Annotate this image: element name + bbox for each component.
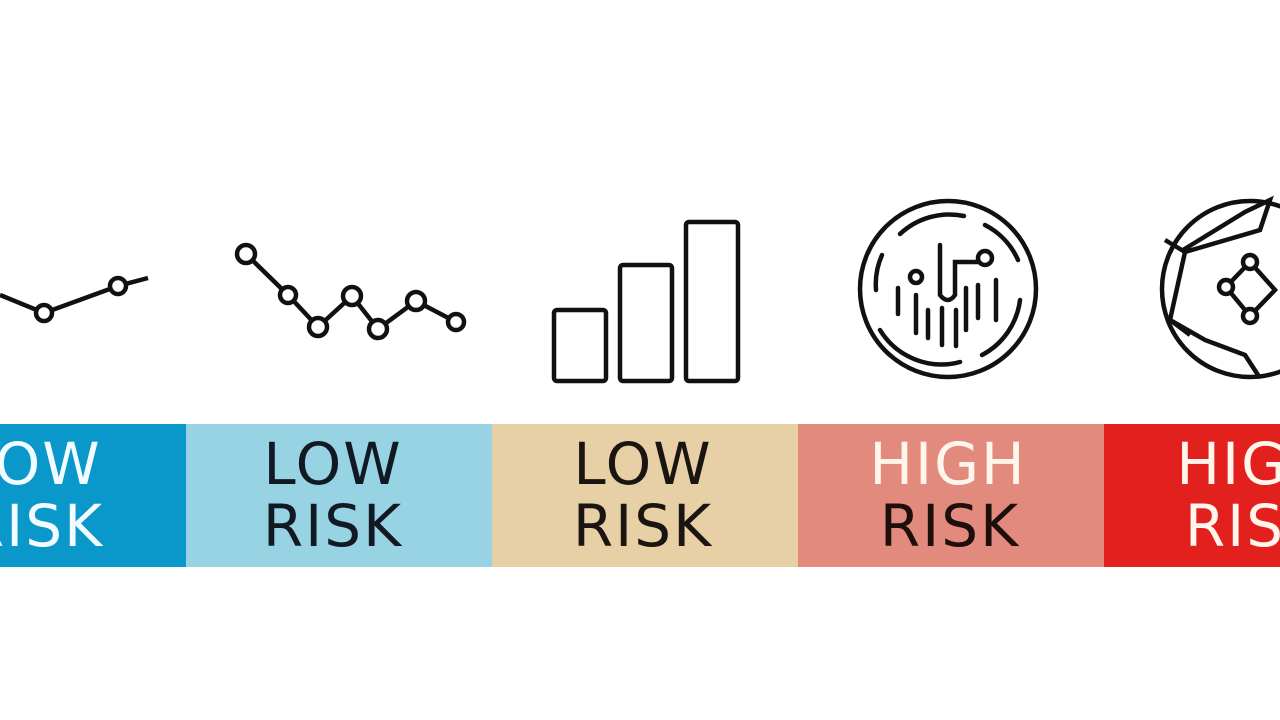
- icon: bar chart: [554, 222, 738, 381]
- panel: segment 3 low risk: LOW: [573, 430, 713, 498]
- panel: segment 2 low risk: [186, 424, 492, 567]
- icon: circular data seal: [860, 201, 1036, 377]
- panel: segment 2 low risk: RISK: [263, 492, 403, 560]
- panel: segment 2 low risk: LOW: [263, 430, 403, 498]
- panel: segment 4 high risk: [798, 424, 1104, 567]
- panel: segment 5 high risk: [1104, 424, 1280, 567]
- panel: segment 1 low risk: [0, 424, 186, 567]
- panel: segment 4 high risk: HIGH: [869, 430, 1027, 498]
- panel: segment 3 low risk: RISK: [573, 492, 713, 560]
- panel: segment 3 low risk: [492, 424, 798, 567]
- panel: segment 4 high risk: RISK: [880, 492, 1020, 560]
- icon: line chart partial: [0, 278, 148, 321]
- icon: zigzag line chart: [237, 245, 464, 338]
- icon: network globe partial: [1162, 200, 1280, 378]
